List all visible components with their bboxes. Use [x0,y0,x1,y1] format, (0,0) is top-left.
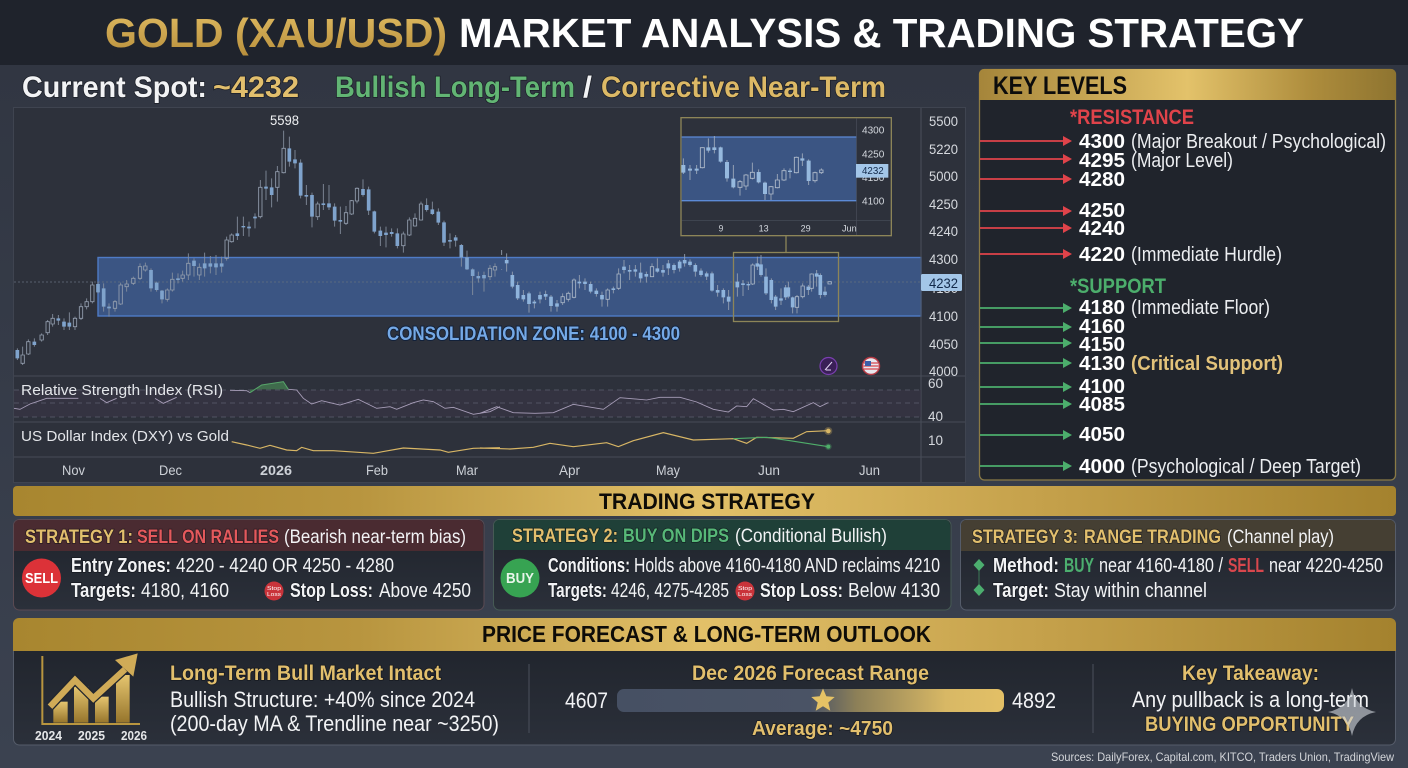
long-term bull market text [170,662,499,736]
spot price and bias subheading: Bullish Long-Term [335,71,575,104]
long-term bull market text: (200-day MA & Trendline near ~3250) [170,711,499,736]
icon: bullet diamonds [974,559,984,596]
key takeaway text: Key Takeaway: [1182,662,1319,685]
forecast heading bar: PRICE FORECAST & LONG-TERM OUTLOOK [482,621,931,647]
strategy 2 details [548,555,940,602]
support levels: 4085 [1079,393,1125,416]
DXY vs gold panel: US Dollar Index (DXY) vs Gold [21,428,229,445]
time axis labels: May [656,463,680,478]
strategy 2 heading: (Conditional Bullish) [735,525,887,547]
current price badge: 4232 [929,275,958,291]
support levels: 4180 [1079,296,1125,319]
strategy 3 details: Method: [993,555,1059,577]
price axis labels: 5000 [929,168,958,184]
strategy 2 details: Stop Loss: [760,580,843,602]
inset zoom chart: 13 [759,224,769,234]
panel: strategy 1 [14,520,484,610]
icon: buy badge: BUY [506,571,534,587]
RSI panel: 60 [928,375,943,391]
spot price and bias subheading: / [583,71,593,104]
support levels: 4130 [1079,352,1125,375]
spot price and bias subheading: Current Spot: [22,71,207,104]
current range highlight box [734,252,838,322]
RSI panel: 40 [928,408,943,424]
consolidation zone label: CONSOLIDATION ZONE: 4100 - 4300 [387,324,680,345]
resistance levels: 4300 [1079,130,1125,153]
strategy 1 details: 4180, 4160 [141,580,229,602]
strategy 1 details: 4220 - 4240 OR 4250 - 4280 [176,555,394,577]
icon: rising gold chart [35,653,147,743]
strategy 2 details: 4246, 4275-4285 [611,580,729,602]
strategy 3 details [993,555,1383,602]
DXY vs gold panel [21,427,943,453]
strategy 3 details: SELL [1228,555,1264,577]
high price label: 5598 [270,113,299,128]
event icon: US flag [862,358,880,374]
time axis labels: Jun [758,463,780,478]
key takeaway text: BUYING OPPORTUNITY [1145,713,1354,736]
inset zoom chart: Jun [842,224,857,234]
support heading: *SUPPORT [1070,275,1166,298]
price axis labels: 4300 [929,251,958,267]
resistance levels: 4240 [1079,217,1125,240]
consolidation zone band [98,258,921,316]
time axis labels: Dec [159,463,182,478]
resistance levels: 4295 [1079,149,1125,172]
strategy 3 details: BUY [1064,555,1094,577]
strategy 2 details: Conditions: [548,555,630,577]
inset zoom chart: 4150 [862,173,884,184]
forecast range chart: Dec 2026 Forecast Range [692,662,929,685]
inset zoom chart: 9 [719,224,723,234]
price axis labels [929,113,958,379]
icon: buy badge [500,558,540,598]
RSI panel [14,375,943,424]
key takeaway text [1132,662,1369,736]
panel: key levels [979,69,1396,480]
trading strategy heading bar [13,486,1396,516]
strategy 1 details [71,555,471,602]
inset zoom chart: 4250 [862,149,884,160]
time axis labels: Apr [559,463,580,478]
inset zoom chart: 4100 [862,197,884,208]
strategy 3 heading [972,526,1334,548]
strategy 2 details: Below 4130 [848,580,940,602]
resistance levels: (Immediate Hurdle) [1131,244,1282,266]
strategy 1 heading: STRATEGY 1: [25,526,133,548]
price axis labels: 4050 [929,336,958,352]
icon: average star [811,688,835,711]
candlesticks: march to june [502,250,831,313]
strategy 2 details: Holds above 4160-4180 AND reclaims 4210 [634,555,940,577]
support levels: (Immediate Floor) [1131,297,1270,319]
strategy 1 details: Targets: [71,580,136,602]
forecast range chart: 4607 [565,688,608,713]
price axis labels: 5500 [929,113,958,129]
time axis labels: Mar [456,463,478,478]
price axis labels: 4100 [929,308,958,324]
RSI panel: Relative Strength Index (RSI) [21,382,223,399]
time axis labels: Nov [62,463,85,478]
resistance arrows [980,136,1072,259]
icon: rising gold chart: 2026 [121,729,147,743]
strategy 1 details: Loss [267,592,281,598]
icon: sparkle [1328,688,1376,736]
strategy 2 details: Stop [738,586,752,592]
strategy 1 details: Stop [267,586,281,592]
support levels: 4000 [1079,455,1125,478]
time axis labels: Jun [859,463,880,478]
price axis labels: 5220 [929,141,958,157]
strategy 3 heading: (Channel play) [1227,526,1334,548]
strategy 2 details: Loss [738,592,752,598]
strategy 3 details: Stay within channel [1054,580,1207,602]
support arrows [980,303,1072,471]
price chart panel [14,108,966,482]
price axis labels: 4240 [929,223,958,239]
resistance levels: 4280 [1079,168,1125,191]
support levels: (Critical Support) [1131,353,1283,375]
price axis labels: 4250 [929,196,958,212]
key levels heading: KEY LEVELS [993,72,1127,100]
spot price and bias subheading: ~4232 [213,71,299,104]
strategy 1 details: Above 4250 [379,580,471,602]
time axis labels: 2026 [260,463,293,478]
strategy 3 heading: STRATEGY 3: [972,526,1078,548]
inset zoom chart: 29 [801,224,811,234]
long-term bull market text: Bullish Structure: +40% since 2024 [170,687,475,712]
title bar: GOLD (XAU/USD) [105,10,447,56]
inset zoom chart [681,118,891,236]
strategy 3 details: Target: [993,580,1049,602]
strategy 3 heading: RANGE TRADING [1084,526,1221,548]
forecast range chart: 4892 [1012,688,1056,713]
title bar [0,0,1408,65]
spot price and bias subheading: Corrective Near-Term [601,71,886,104]
event icon: purple marker [820,358,837,374]
support levels: 4150 [1079,333,1125,356]
icon: sell badge: SELL [25,571,58,587]
price axis labels: 4000 [929,363,958,379]
forecast range chart: Average: ~4750 [752,718,893,740]
spot price and bias subheading [22,71,886,104]
forecast range chart [565,662,1056,740]
panel: strategy 3 [960,520,1396,610]
resistance levels: 4220 [1079,243,1125,266]
support levels: 4100 [1079,375,1125,398]
strategy 1 details: Stop Loss: [290,580,373,602]
resistance heading: *RESISTANCE [1070,106,1194,129]
inset zoom chart: 4300 [862,125,884,136]
strategy 2 heading: STRATEGY 2: [512,525,618,547]
icon: sell badge [22,558,61,598]
strategy 1 heading: (Bearish near-term bias) [284,526,466,548]
strategy 2 heading: BUY ON DIPS [623,525,729,547]
support levels [1079,296,1361,478]
key takeaway text: Any pullback is a long-term [1132,687,1369,712]
resistance levels: 4250 [1079,199,1125,222]
strategy 1 details: Entry Zones: [71,555,171,577]
time axis labels: Feb [366,463,388,478]
candlesticks: november to march [17,131,497,365]
resistance levels [1079,130,1386,266]
time axis labels [62,463,880,478]
forecast heading bar [13,618,1396,651]
strategy 3 details: near 4220-4250 [1269,555,1383,577]
strategy 1 heading [25,526,466,548]
icon: rising gold chart: 2025 [78,729,105,743]
long-term bull market text: Long-Term Bull Market Intact [170,662,441,685]
trading strategy heading bar: TRADING STRATEGY [599,489,815,514]
strategy 3 details: near 4160-4180 / [1099,555,1223,577]
support levels: (Psychological / Deep Target) [1131,456,1361,478]
strategy 2 heading [512,525,887,547]
inset zoom chart: 4232 [862,166,884,177]
support levels: 4050 [1079,423,1125,446]
support levels: 4160 [1079,315,1125,338]
price axis labels: 4150 [929,280,958,296]
panel: strategy 2 [494,520,951,610]
strategy 1 heading: SELL ON RALLIES [137,526,279,548]
DXY vs gold panel: 10 [928,432,943,448]
key levels heading [979,69,1396,100]
strategy 2 details: Targets: [548,580,607,602]
panel: price forecast and outlook [13,618,1396,745]
title bar: MARKET ANALYSIS & TRADING STRATEGY [459,10,1304,56]
resistance levels: (Major Level) [1131,150,1233,172]
icon: rising gold chart: 2024 [35,729,62,743]
